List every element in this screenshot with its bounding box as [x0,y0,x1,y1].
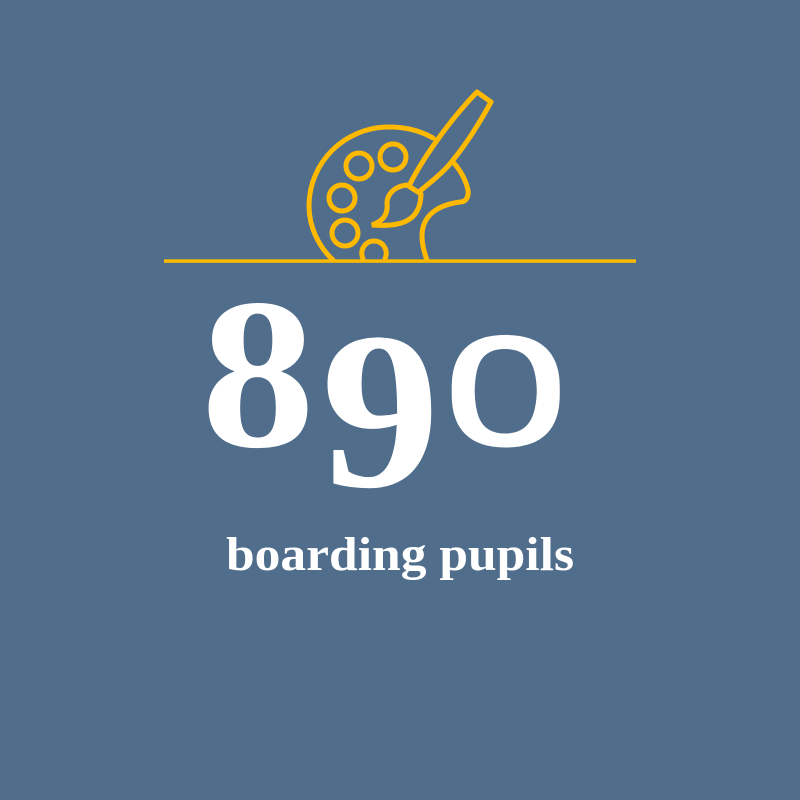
big number: 890: 9 [321,286,440,535]
big number: 890: 8 [201,255,315,493]
icon: palette and paintbrush [309,92,491,260]
big number: 890: 0 [442,304,569,476]
divider line [164,259,636,263]
big number: 890 [201,255,569,535]
label: boarding pupils: boarding pupils [226,528,574,581]
